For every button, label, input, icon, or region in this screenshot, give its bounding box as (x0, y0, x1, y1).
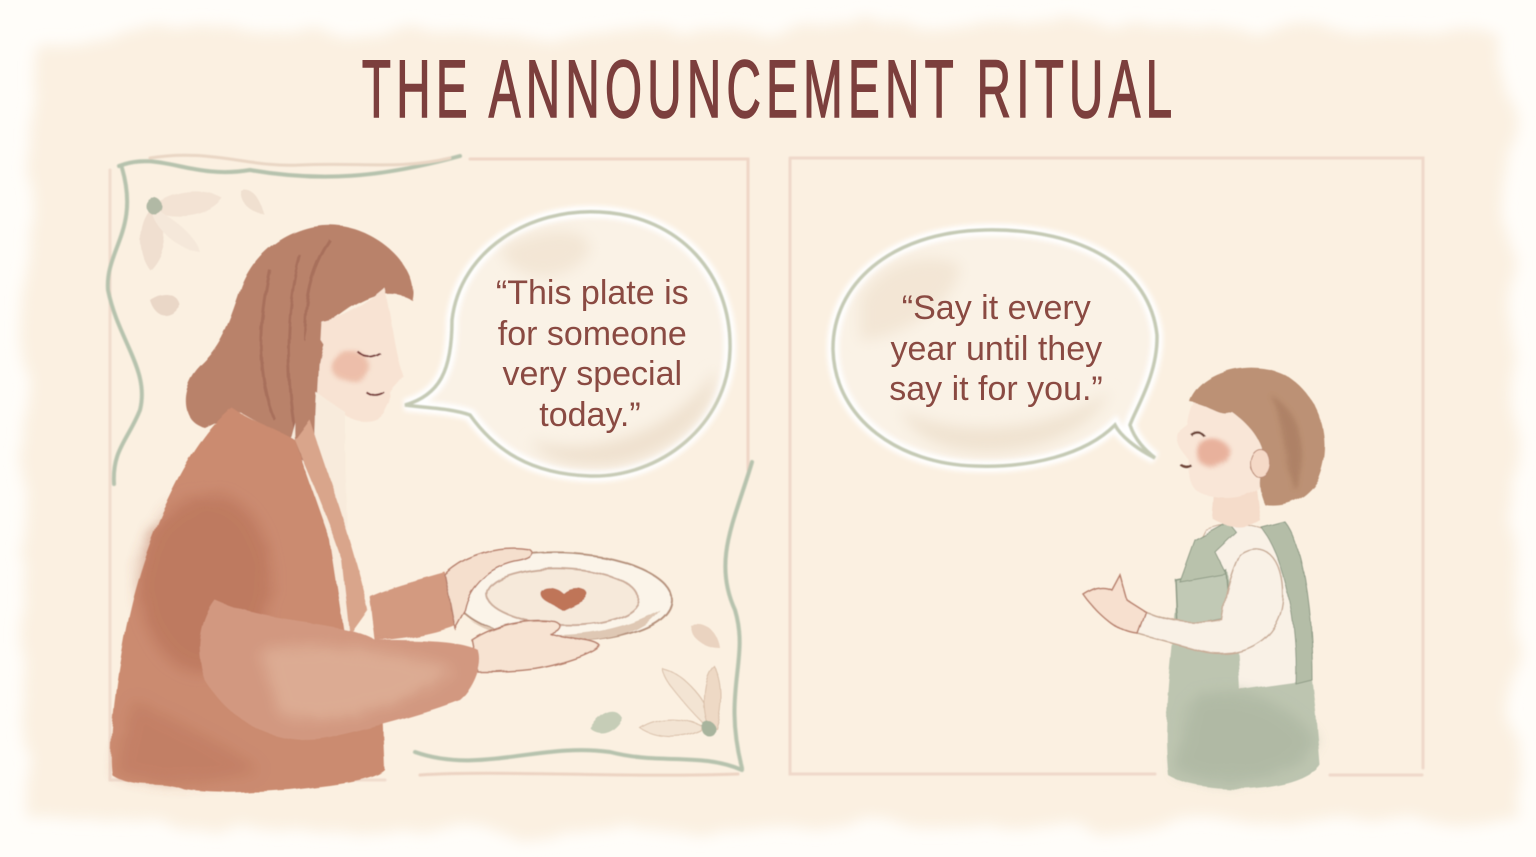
right strap (1262, 522, 1312, 684)
neck and top (290, 385, 352, 640)
far sleeve (370, 572, 455, 640)
shirt (1190, 524, 1308, 690)
icon: top-left flowers (140, 189, 264, 315)
eye and mouth (1179, 433, 1205, 465)
speech text: mother: “This plate is (496, 274, 689, 312)
left strap (1180, 522, 1236, 582)
upper hand (445, 549, 533, 628)
panel frame (790, 158, 1423, 775)
speech text: child: say it for you.” (889, 370, 1103, 408)
near sleeve (200, 600, 480, 740)
hair front lock (295, 320, 324, 468)
speech text: child: year until they (890, 330, 1102, 368)
hand (1084, 575, 1146, 634)
eye and mouth (358, 352, 384, 395)
cardigan (111, 408, 385, 793)
speech text: child: “Say it every (902, 289, 1091, 327)
neck (1212, 480, 1260, 527)
hair (1190, 368, 1325, 506)
panel frame (108, 155, 752, 780)
blush (1196, 439, 1230, 467)
plate (453, 549, 673, 645)
heart on plate (540, 587, 588, 611)
speech bubble: child (833, 230, 1157, 466)
speech text: mother: for someone (498, 315, 687, 353)
speech bubble: mother (405, 212, 730, 476)
bib pocket (1176, 570, 1230, 628)
panel: left scene (108, 155, 752, 793)
speech text: mother: today.” (539, 396, 641, 434)
title: THE ANNOUNCEMENT RITUAL (362, 44, 1172, 135)
panel: right scene (790, 158, 1423, 789)
hair back (185, 225, 413, 468)
ear (1250, 449, 1270, 477)
figure: mother holding plate (111, 225, 673, 793)
face (318, 288, 403, 421)
icon: bottom-right flowers (590, 624, 721, 737)
lower hand (472, 621, 600, 672)
head (1177, 387, 1280, 498)
speech text: mother: very special (503, 355, 682, 393)
overalls (1166, 572, 1320, 789)
figure: child (1084, 368, 1325, 789)
blush (331, 351, 369, 381)
sleeve (1138, 549, 1283, 653)
